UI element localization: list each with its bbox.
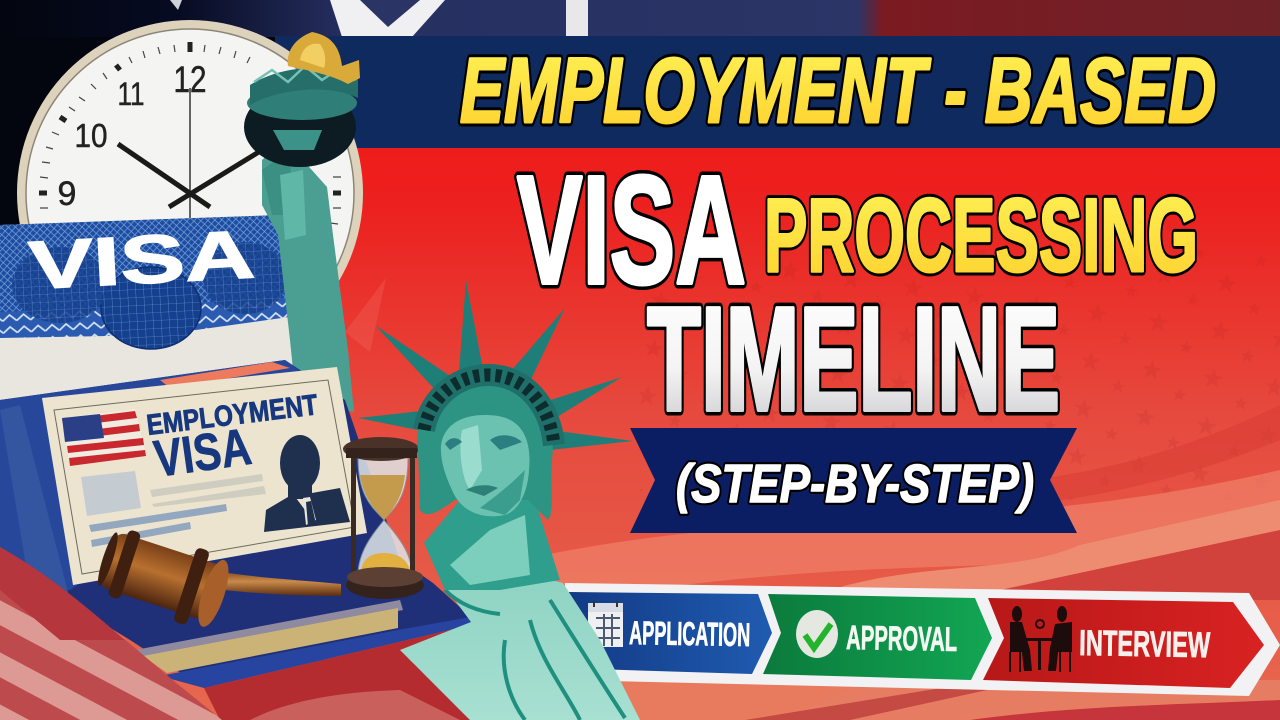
- card text lines: [89, 474, 266, 547]
- face: [441, 415, 530, 516]
- robe: [400, 575, 640, 720]
- crown band: [424, 375, 554, 445]
- gavel: [91, 520, 341, 634]
- raised arm with torch: [244, 32, 360, 412]
- icon: torch dish: [244, 87, 356, 167]
- card heading: EMPLOYMENT: [145, 389, 320, 442]
- step: application: APPLICATION: [629, 614, 751, 653]
- step-by-step banner: (STEP-BY-STEP): [676, 454, 1034, 514]
- employment visa card: VISA: [151, 418, 255, 489]
- visa paper lettering: VISA: [27, 216, 256, 304]
- step: interview: [983, 598, 1264, 688]
- icon: calendar: [588, 601, 623, 647]
- title: TIMELINE: [647, 277, 1060, 442]
- draped flag foreground: [0, 547, 543, 720]
- step-by-step banner: [630, 428, 1077, 533]
- visa paper: [0, 215, 340, 410]
- icon: check mark: [796, 610, 838, 658]
- step-by-step banner: (STEP-BY-STEP): [676, 454, 1034, 514]
- title: VISA: [517, 144, 746, 316]
- step: interview: INTERVIEW: [1079, 622, 1211, 665]
- step: approval: [763, 594, 992, 680]
- icon: torch railing: [250, 68, 358, 105]
- process step ribbon: [565, 583, 1280, 696]
- title: VISA: VISA: [517, 144, 746, 316]
- photo placeholder: [81, 471, 141, 516]
- wall clock: 10: [74, 117, 108, 154]
- wall clock: 12: [174, 59, 206, 100]
- employment visa card: [42, 367, 367, 585]
- wall clock: 11: [118, 76, 144, 112]
- applicant silhouette: [264, 435, 350, 532]
- hourglass: [343, 437, 424, 599]
- passport: [0, 360, 471, 688]
- step: approval: APPROVAL: [846, 619, 958, 659]
- step: application: [569, 592, 772, 674]
- icon: flame: [288, 32, 360, 84]
- title: VISA: VISA: [517, 144, 746, 316]
- neck: [424, 500, 560, 590]
- icon: two people at a table: [1010, 606, 1072, 672]
- wall clock: [17, 20, 363, 281]
- icon: statue arm: [262, 140, 354, 412]
- icon: crown spikes: [358, 280, 633, 450]
- icon: US flag: [62, 409, 146, 466]
- navy title band: [275, 36, 1280, 148]
- hair: [417, 382, 553, 520]
- statue of liberty: [358, 280, 640, 720]
- top dark flag strip: [0, 0, 1280, 237]
- wall clock: 9: [58, 175, 76, 213]
